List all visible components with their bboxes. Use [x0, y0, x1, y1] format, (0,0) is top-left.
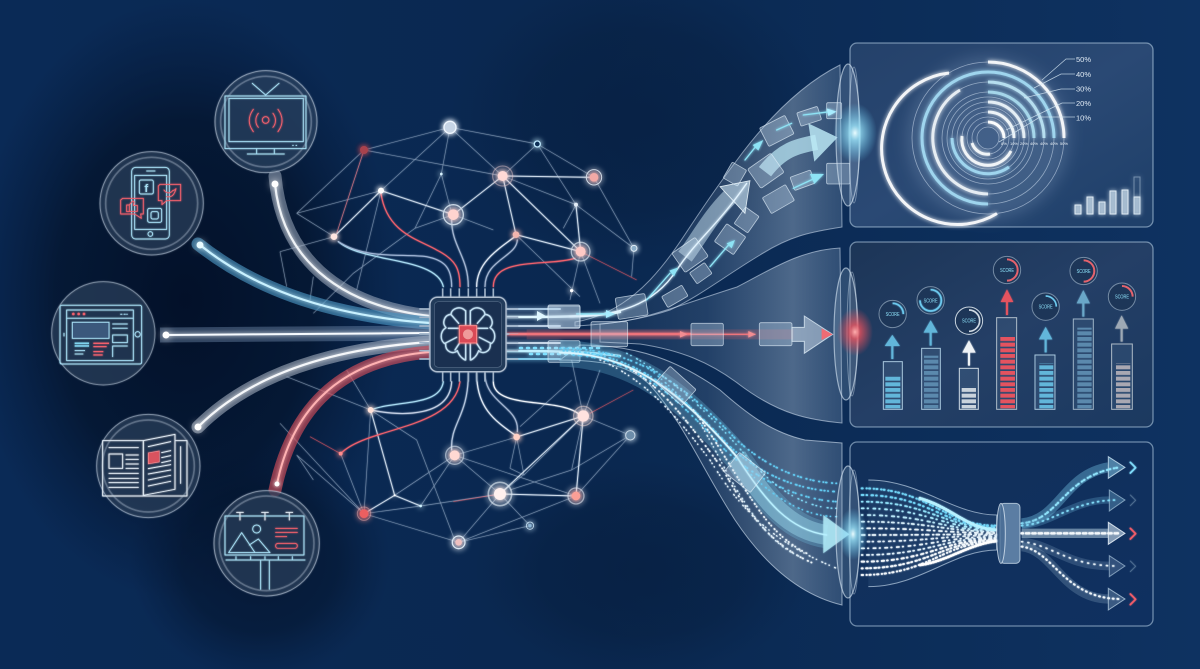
middle output flow — [510, 306, 833, 362]
icon: social media phone: f — [144, 183, 148, 195]
percent labels — [1076, 55, 1091, 122]
percent callouts — [999, 59, 1075, 142]
score column 1 — [879, 300, 906, 409]
score column 3 — [955, 307, 983, 409]
large white-red arrow — [792, 316, 833, 353]
data stream: tablet — [160, 332, 430, 338]
chip output lines — [506, 309, 690, 359]
thin radial rings — [912, 62, 1064, 214]
lower output flow — [560, 348, 849, 568]
network graph: lower — [280, 360, 635, 549]
stream packets — [656, 366, 766, 493]
ring axis labels: 40% — [1050, 141, 1058, 146]
percent labels: 50% — [1076, 55, 1091, 64]
output chevrons — [1130, 462, 1136, 605]
network edges upper — [280, 127, 637, 313]
funnel particles — [862, 488, 997, 575]
score column 6: SCORE — [1077, 269, 1091, 275]
radial chart arcs — [882, 62, 1064, 225]
data stream: social phone — [196, 242, 430, 323]
score column 4: SCORE — [1000, 268, 1014, 274]
brain outline — [441, 308, 495, 360]
network edges lower — [280, 360, 633, 542]
panel: score bars — [850, 242, 1153, 427]
large curved arrow — [685, 197, 730, 257]
output arrow 1 — [1022, 457, 1125, 523]
output arrow 2 — [1022, 490, 1125, 526]
network nodes upper — [331, 121, 637, 292]
chip pins — [419, 288, 518, 382]
red arrow line — [510, 331, 756, 338]
chip body — [430, 297, 506, 372]
score column 1: SCORE — [886, 312, 900, 318]
score column 5: SCORE — [1039, 305, 1053, 311]
output arrow 5 — [1022, 547, 1125, 610]
percent labels: 40% — [1076, 70, 1091, 79]
percent labels: 20% — [1076, 99, 1091, 108]
AI processor chip — [419, 288, 518, 382]
data stream: billboard — [274, 352, 430, 490]
panel: data funnel — [850, 442, 1153, 626]
icon: billboard — [214, 491, 319, 596]
icon: website tablet — [52, 282, 155, 385]
broad cyan stream arrow — [560, 353, 827, 535]
funnel outline — [868, 480, 997, 587]
icon: television — [215, 71, 317, 173]
bright flow line — [570, 108, 837, 318]
score column 4 — [993, 256, 1021, 409]
ring axis labels — [1001, 141, 1068, 146]
funnel: lower channel — [560, 345, 842, 605]
score column 6 — [1070, 257, 1097, 409]
radial chart glow — [906, 56, 1070, 220]
score column 7 — [1108, 283, 1136, 409]
mini bar chart — [1075, 177, 1140, 214]
shadow behind source icons — [0, 0, 830, 669]
ring axis labels: 10% — [1010, 141, 1018, 146]
icon: newspaper — [97, 414, 200, 518]
network wires lower — [341, 373, 580, 454]
source icons lower — [97, 414, 319, 596]
lens: middle — [834, 268, 873, 400]
ring axis labels: 40% — [1030, 141, 1038, 146]
upper output flow — [548, 103, 850, 328]
ring axis labels: 40% — [1040, 141, 1048, 146]
particle streams — [560, 348, 837, 568]
ring axis labels: 8% — [1001, 141, 1007, 146]
funnel: upper channel — [575, 65, 842, 326]
network nodes lower — [339, 406, 635, 549]
lens: lower — [836, 466, 868, 598]
ring axis labels: 20% — [1020, 141, 1028, 146]
lens: upper — [833, 64, 877, 206]
score column 5 — [1032, 293, 1059, 409]
ring axis labels: 50% — [1060, 141, 1068, 146]
percent labels: 30% — [1076, 84, 1091, 94]
icon: social media phone — [100, 152, 203, 255]
data stream: TV — [272, 176, 430, 316]
network wires upper — [338, 193, 575, 287]
funnel ring — [997, 503, 1020, 563]
score column 7: SCORE — [1115, 295, 1129, 301]
funnel: middle channel — [600, 248, 842, 423]
packets on red line — [548, 306, 792, 362]
score column 2 — [917, 287, 944, 409]
brain core chip — [459, 326, 477, 343]
percent labels: 10% — [1076, 114, 1091, 122]
network graph: upper — [280, 121, 637, 313]
score column 2: SCORE — [924, 298, 938, 304]
source icons upper — [52, 71, 317, 385]
score column 3: SCORE — [962, 319, 976, 325]
output arrow 4 — [1022, 542, 1125, 577]
curved data packets — [548, 103, 850, 328]
output arrow 3 — [1022, 522, 1125, 544]
panel: radial chart — [850, 43, 1153, 227]
data stream: newspaper — [194, 342, 430, 430]
